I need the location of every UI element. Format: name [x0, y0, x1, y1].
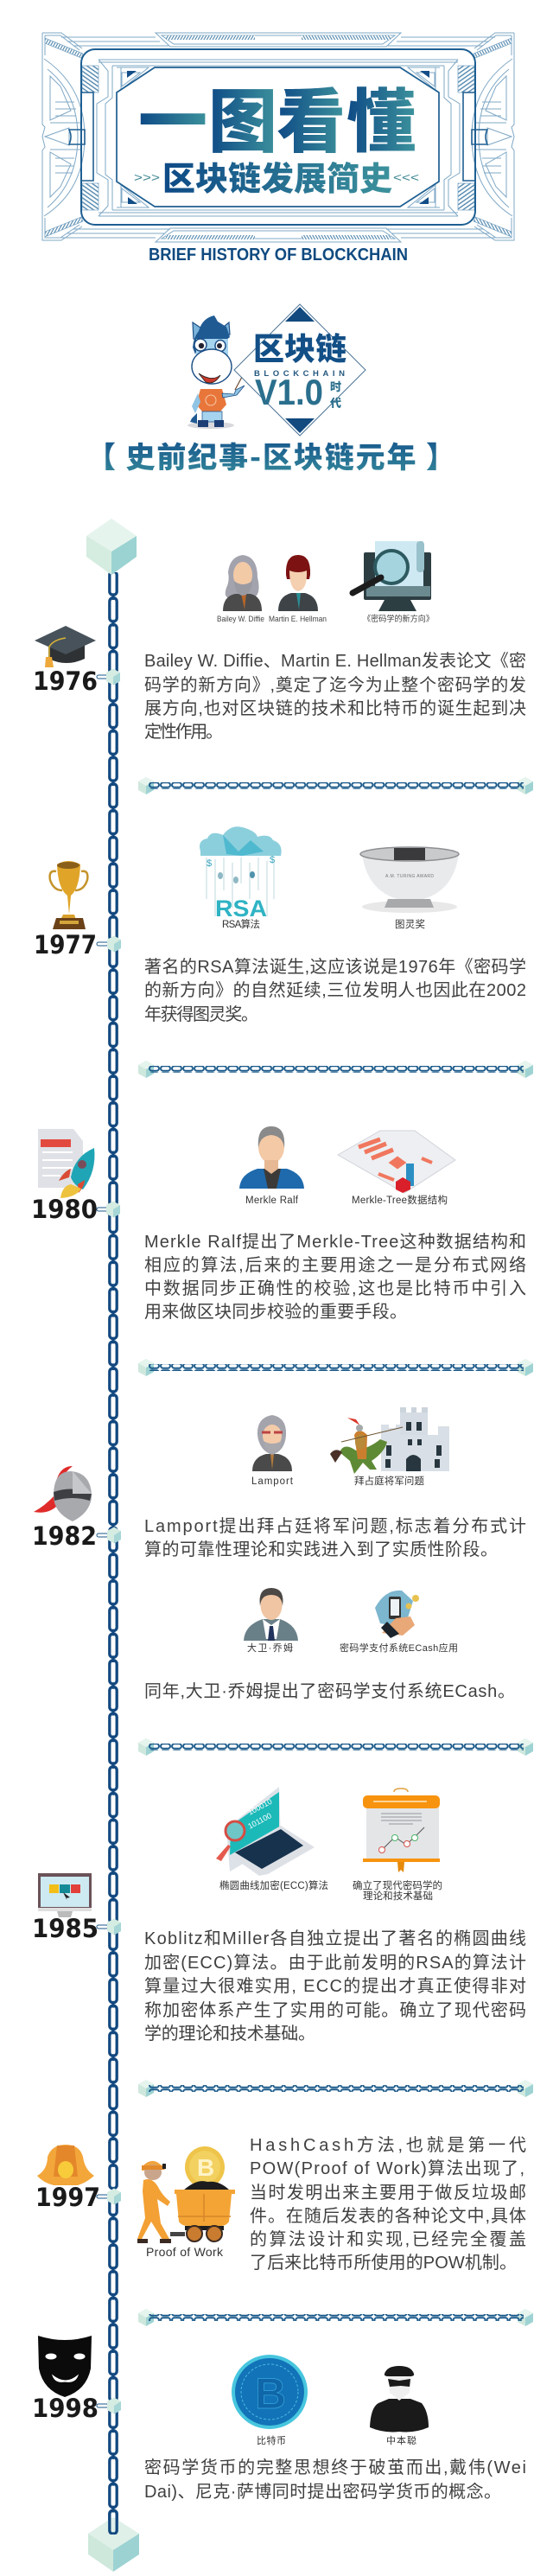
subtitle: 区块链发展简史: <<< — [393, 170, 419, 184]
1985 year: 1985 — [32, 1914, 99, 1943]
badge: 区块链 V1.0 时代: V1.0 — [255, 372, 323, 412]
1977 icon: RSA cloud — [200, 826, 282, 921]
1998 year: 1998 — [32, 2394, 99, 2423]
1985 caption board — [353, 1879, 442, 1902]
1997 illustration: miner with bitcoin cart: B — [197, 2154, 214, 2181]
header frame ornament — [42, 33, 514, 242]
divider chain 4 — [138, 1738, 533, 1756]
1985 description: 称加密体系产生了实用的可能。确立了现代密码 — [144, 2000, 526, 2020]
1980 portrait: Merkle Ralf — [239, 1126, 304, 1189]
1985 description: 学的理论和技术基础。 — [144, 2024, 315, 2044]
title: 一图看懂: 懂 — [346, 67, 416, 167]
1998 caption bitcoin: 比特币 — [257, 2434, 286, 2446]
1976 icon: monitor and magnifier — [353, 541, 431, 611]
1982 portrait: Lamport — [252, 1415, 292, 1471]
1998 description — [144, 2458, 526, 2502]
1977 caption RSA: RSA算法 — [222, 918, 260, 930]
1982 portrait: David Chaum — [244, 1588, 298, 1641]
section heading: 【 史前纪事-区块链元年 】 — [86, 434, 455, 476]
1977 description — [144, 957, 526, 1024]
bottom cube — [88, 2517, 139, 2572]
1982 description part one: 算的可靠性理论和实践进入到了实质性阶段。 — [144, 1540, 498, 1559]
1985 icon: laptop with magnifier — [216, 1787, 315, 1876]
title: 一图看懂: 图 — [208, 67, 277, 167]
1997 description — [250, 2135, 526, 2273]
1977 icon: trophy — [50, 861, 87, 929]
1982 caption ECash: 密码学支付系统ECash应用 — [340, 1642, 458, 1654]
1997 caption POW: Proof of Work — [146, 2245, 224, 2259]
1997 description: POW(Proof of Work)算法出现了, — [250, 2158, 524, 2178]
1977 icon: Turing award silver bowl — [360, 847, 459, 913]
1977 caption Turing: 图灵奖 — [395, 918, 425, 930]
1998 description: Dai)、尼克·萨博同时提出密码学货币的概念。 — [144, 2481, 501, 2502]
1976 description: 展方向,也对区块链的技术和比特币的诞生起到决 — [144, 698, 526, 718]
1980 caption Merkle: Merkle Ralf — [245, 1196, 299, 1206]
1997 description: 当时发明出来主要用于做反垃圾邮 — [250, 2183, 526, 2203]
1985 icon: laptop with magnifier: 101100 — [246, 1811, 273, 1831]
1997 description: 件。在随后发表的各种论文中,具体 — [250, 2206, 526, 2226]
1980 icon: Merkle tree isometric doc — [338, 1131, 455, 1193]
1997 icon: miner hard hat — [37, 2145, 94, 2185]
title: 一图看懂 — [138, 67, 416, 167]
1998 icon: digital bitcoin — [232, 2355, 308, 2429]
1977 year: 1977 — [34, 930, 97, 960]
divider chain 1 — [138, 777, 533, 794]
subtitle: 区块链发展简史: >>> — [134, 170, 160, 184]
1982 icon: ECash phone in hand — [375, 1591, 419, 1638]
subtitle: 区块链发展简史: 区块链发展简史 — [162, 152, 392, 200]
1998 icon: theatre mask — [38, 2336, 92, 2397]
1980 description: 中数据同步正确性的校验,这也是比特币中引入 — [144, 1278, 526, 1298]
1977 icon: RSA cloud: $ — [207, 858, 212, 869]
1976 portrait: Bailey W. Diffie — [223, 555, 262, 611]
divider chain 5 — [138, 2080, 533, 2097]
1976 year: 1976 — [33, 666, 98, 696]
1977 icon: RSA cloud: RSA — [215, 896, 267, 921]
1985 description: 加密(ECC)算法。由于此前发明的RSA的算法计 — [144, 1953, 526, 1973]
divider chain 3 — [138, 1359, 533, 1376]
divider chain 6 — [138, 2309, 533, 2326]
1985 caption board: 确立了现代密码学的 — [353, 1879, 442, 1891]
1985 description: 算量过大很难实用, ECC的提出才真正使得非对 — [144, 1976, 526, 1996]
top cube — [86, 519, 137, 575]
1980 description: 用来做区块同步校验的重要手段。 — [144, 1302, 407, 1322]
title: 一图看懂: 一 — [138, 67, 207, 167]
divider chain 2 — [138, 1061, 533, 1078]
badge: 区块链 V1.0 时代: 区块链 — [253, 324, 346, 369]
1976 description: 码学的新方向》,奠定了迄今为止整个密码学的发 — [144, 675, 526, 695]
1982 year: 1982 — [32, 1521, 97, 1551]
1985 description: Koblitz和Miller各自独立提出了著名的椭圆曲线 — [144, 1929, 526, 1948]
1980 description: 相应的算法,后来的主要用途之一是分布式网络 — [144, 1255, 526, 1275]
1998 icon: digital bitcoin: B — [255, 2369, 286, 2418]
1982 icon: knight and castle — [330, 1407, 449, 1474]
1998 caption Satoshi: 中本聪 — [386, 2434, 416, 2446]
1985 description — [144, 1929, 526, 2044]
1977 description: 年获得图灵奖。 — [144, 1004, 258, 1024]
1977 icon: Turing award silver bowl: A.M. TURING AWARD — [385, 874, 434, 879]
1997 description: 了后来比特币所使用的POW机制。 — [250, 2253, 517, 2273]
1976 description: Bailey W. Diffie、Martin E. Hellman发表论文《密 — [144, 651, 526, 671]
1982 caption Chaum: 大卫·乔姆 — [247, 1642, 293, 1654]
vertical chain timeline — [108, 572, 118, 2535]
english subtitle: BRIEF HISTORY OF BLOCKCHAIN — [149, 245, 408, 265]
1976 captions names: Martin E. Hellman — [269, 615, 327, 624]
badge: 区块链 V1.0 时代: 时 — [330, 378, 341, 394]
1977 description: 的新方向》的自然延续,三位发明人也因此在2002 — [144, 980, 526, 1000]
1982 description part one: Lamport提出拜占廷将军问题,标志着分布式计 — [144, 1516, 526, 1536]
1982 caption Byzantine: 拜占庭将军问题 — [354, 1475, 425, 1487]
1997 illustration: miner with bitcoin cart — [137, 2146, 235, 2243]
1985 icon: monitor — [38, 1873, 92, 1917]
1976 captions names: Bailey W. Diffie — [217, 615, 264, 624]
1980 description: Merkle Ralf提出了Merkle-Tree这种数据结构和 — [144, 1232, 526, 1252]
mascot: blue horse with pointer — [188, 316, 248, 429]
1980 description — [144, 1232, 526, 1322]
1977 description: 著名的RSA算法诞生,这应该说是1976年《密码学 — [144, 957, 526, 977]
1998 description: 密码学货币的完整思想终于破茧而出,戴伟(Wei — [144, 2458, 526, 2477]
1997 year: 1997 — [35, 2183, 100, 2212]
title: 一图看懂: 看 — [276, 67, 346, 167]
1982 description part two: 同年,大卫·乔姆提出了密码学支付系统ECash。 — [144, 1681, 515, 1701]
1980 caption tree: Merkle-Tree数据结构 — [352, 1194, 448, 1206]
1976 caption paper: 《密码学的新方向》 — [363, 614, 434, 624]
1985 icon: laptop with magnifier: 100010 — [246, 1797, 273, 1817]
1997 description: HashCash方法,也就是第一代 — [250, 2135, 526, 2155]
1985 caption board: 理论和技术基础 — [363, 1890, 433, 1902]
1982 description part one — [144, 1516, 526, 1559]
1976 description — [144, 651, 526, 742]
badge: 区块链 V1.0 时代: BLOCKCHAIN — [254, 369, 345, 379]
1985 caption ECC: 椭圆曲线加密(ECC)算法 — [219, 1879, 328, 1891]
1976 description: 定性作用。 — [144, 722, 223, 742]
1976 captions names — [217, 615, 327, 624]
1985 icon: presentation board — [363, 1789, 440, 1872]
1997 description: 的算法设计和实现,已经完全覆盖 — [250, 2229, 526, 2249]
1976 portrait: Martin E. Hellman — [278, 555, 318, 611]
1982 icon: knight helmet — [34, 1466, 92, 1521]
badge: 区块链 V1.0 时代: 代 — [330, 394, 341, 411]
1998 icon: hooded Satoshi silhouette — [370, 2366, 429, 2432]
badge: 区块链 V1.0 时代 — [234, 304, 365, 436]
1982 caption Lamport: Lamport — [251, 1476, 294, 1487]
1977 icon: RSA cloud: $ — [270, 855, 275, 865]
1980 year: 1980 — [31, 1195, 98, 1224]
1980 icon: document and rocket — [38, 1129, 94, 1198]
1976 icon: graduation cap — [35, 626, 96, 667]
